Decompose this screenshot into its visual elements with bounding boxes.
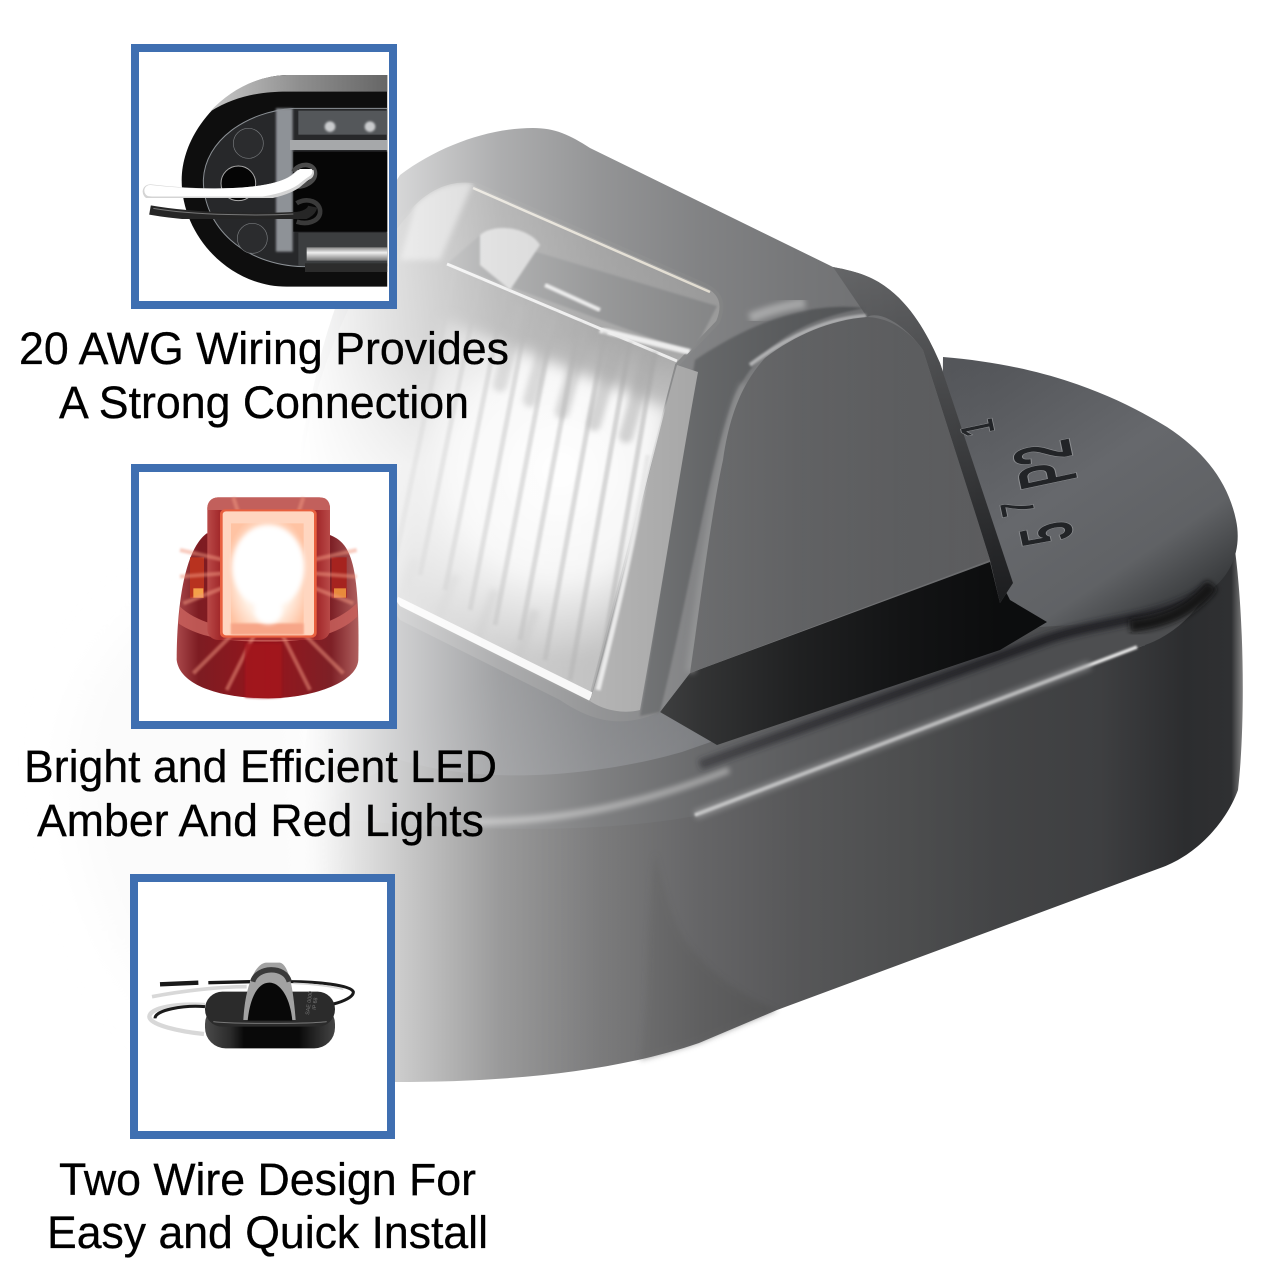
left haze of faded base xyxy=(70,560,320,1060)
caption: LED: Amber And Red Lights xyxy=(37,795,484,846)
red lamp photo xyxy=(177,497,359,698)
caption: wiring: A Strong Connection xyxy=(59,377,469,428)
panel frame xyxy=(135,468,393,725)
inset panel: red LED xyxy=(135,468,393,725)
lens bottom edge xyxy=(395,603,590,699)
lens ribs xyxy=(404,322,658,678)
caption: two wire: Easy and Quick Install xyxy=(47,1207,488,1258)
lens glow xyxy=(432,324,668,700)
caption: LED xyxy=(24,741,497,846)
caption: wiring xyxy=(19,323,509,428)
lens inner window xyxy=(447,235,717,353)
main product photo: LED marker light xyxy=(70,100,1243,1100)
panel frame xyxy=(135,48,393,305)
caption: two wire xyxy=(47,1154,488,1258)
hood body xyxy=(302,128,1013,721)
lens clear side strip xyxy=(590,365,698,712)
dark rim groove xyxy=(700,587,1210,765)
inset panel: wiring xyxy=(135,48,393,305)
embossed mark: 1 xyxy=(951,415,1006,441)
horizontal white fade over product xyxy=(290,100,1000,1100)
rim band in front of the slot xyxy=(300,587,1210,829)
hood side face xyxy=(690,317,990,673)
caption: LED: Bright and Efficient LED xyxy=(24,741,497,792)
small lamp photo with wires xyxy=(149,963,353,1048)
black slot under hood xyxy=(660,560,1047,745)
base side reflection wedge xyxy=(640,853,777,1060)
embossed mark xyxy=(951,415,1096,552)
wiring closeup photo xyxy=(150,75,387,287)
small lamp photo with wires: SAE 0000 xyxy=(305,991,314,1015)
hood inner dark band xyxy=(640,307,865,716)
embossed mark: 7 xyxy=(991,495,1046,521)
embossed mark: 5 xyxy=(1002,515,1090,552)
small lamp photo with wires: IP 68 xyxy=(312,997,319,1010)
hood dark right edge xyxy=(833,267,1013,603)
hood highlight strip xyxy=(750,316,866,365)
caption: wiring: 20 AWG Wiring Provides xyxy=(19,323,509,374)
caption: two wire: Two Wire Design For xyxy=(59,1154,476,1205)
embossed mark: P2 xyxy=(995,433,1096,496)
base side wall xyxy=(300,530,1243,1082)
inset panel: two wire design xyxy=(134,878,391,1135)
lens xyxy=(300,182,722,712)
dark rim corner xyxy=(1130,585,1212,626)
upper scalloped ribs xyxy=(492,344,654,444)
panel frame xyxy=(134,878,391,1135)
rim highlight xyxy=(695,647,1137,815)
base top surface xyxy=(300,357,1238,814)
